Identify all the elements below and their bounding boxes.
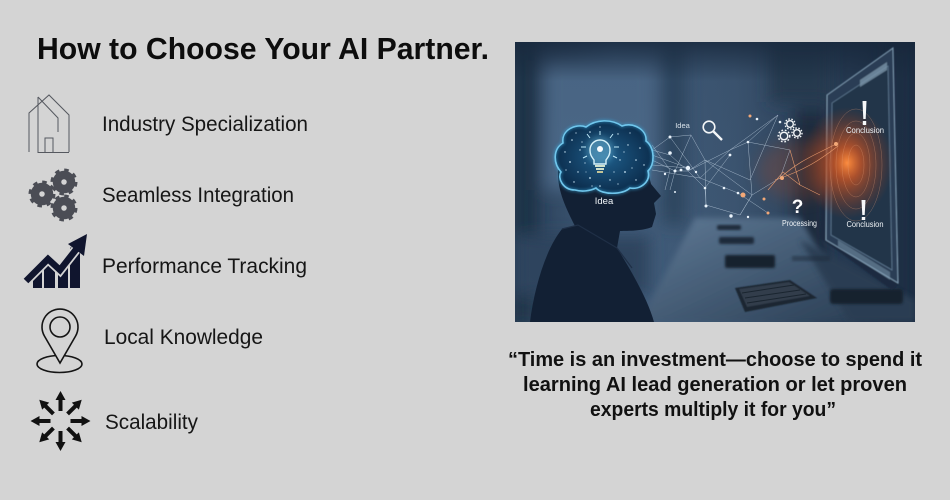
quote: “Time is an investment—choose to spend it xyxy=(508,349,922,371)
icon: gears xyxy=(30,170,76,220)
lightbulb xyxy=(581,131,619,172)
person silhouette xyxy=(530,170,661,322)
title: How to Choose Your AI Partner. xyxy=(37,31,489,66)
list: partner criteria xyxy=(26,95,308,451)
label: idea small: Idea xyxy=(675,121,691,130)
label: conclusion bottom xyxy=(846,200,884,229)
label: local knowledge: Local Knowledge xyxy=(104,326,263,349)
label: processing question: ? xyxy=(792,197,803,218)
label: conclusion top xyxy=(846,101,884,135)
network nodes xyxy=(664,118,781,218)
icon: rising chart xyxy=(26,234,87,288)
network lines xyxy=(652,115,790,215)
icon: expanding arrows xyxy=(30,391,90,451)
label: seamless integration: Seamless Integration xyxy=(102,184,294,207)
blurred keyboards xyxy=(717,225,903,312)
label: idea under cloud: Idea xyxy=(595,196,614,207)
label: performance tracking: Performance Tracking xyxy=(102,255,307,278)
label: industry specialization: Industry Specialization xyxy=(102,113,308,136)
orange glow xyxy=(804,110,890,216)
quote xyxy=(508,349,922,421)
concentric rings xyxy=(830,109,882,221)
quote: learning AI lead generation or let proven xyxy=(523,374,907,396)
cloud sparkles xyxy=(564,126,645,187)
brain cloud xyxy=(555,121,653,193)
icon: magnifier xyxy=(703,121,722,140)
table xyxy=(651,215,842,320)
label: conclusion bottom: Conclusion xyxy=(846,219,884,229)
icon: house xyxy=(29,95,69,152)
label: processing question xyxy=(782,200,816,228)
monitor xyxy=(820,48,899,290)
label: conclusion top: Conclusion xyxy=(846,125,884,135)
label: scalability: Scalability xyxy=(105,411,198,434)
label: processing question: Processing xyxy=(782,219,817,228)
photo: AI idea illustration xyxy=(515,42,915,322)
icon: small gears xyxy=(778,119,802,142)
icon: map pin xyxy=(37,309,82,372)
quote: experts multiply it for you” xyxy=(590,399,836,421)
